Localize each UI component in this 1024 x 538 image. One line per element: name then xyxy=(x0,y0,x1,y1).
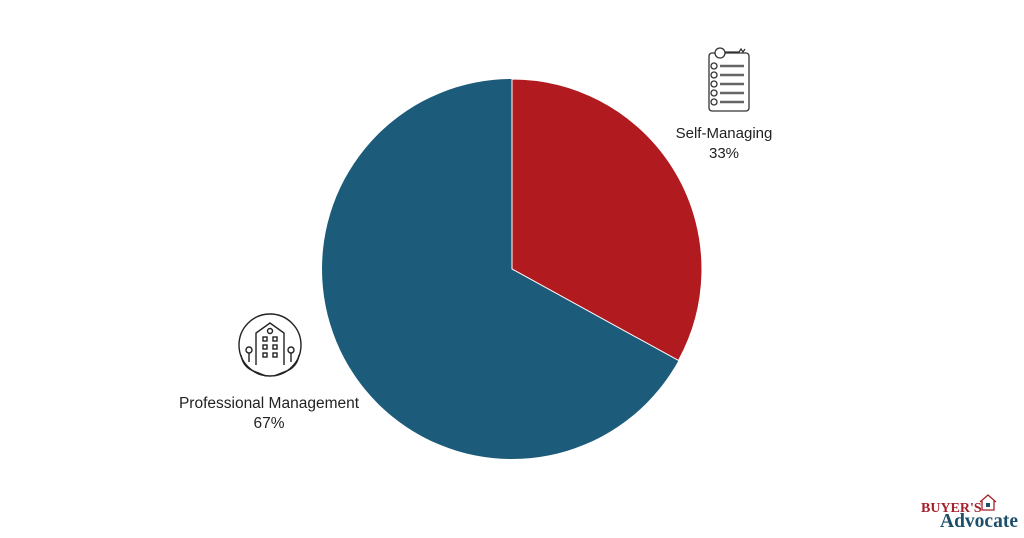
logo: buyers advocate xyxy=(921,495,1018,532)
icon: building in hands xyxy=(239,314,301,376)
pie slice: self-managing xyxy=(512,79,702,360)
label: professional management xyxy=(179,395,360,432)
label: professional management: 67% xyxy=(253,415,285,432)
label: self-managing: Self-Managing xyxy=(676,125,772,142)
logo: buyers advocate: BUYER'S xyxy=(921,501,982,516)
label: professional management: Professional Management xyxy=(179,395,360,412)
label: self-managing: 33% xyxy=(709,145,739,162)
logo: buyers advocate: Advocate xyxy=(940,511,1018,532)
icon: clipboard with key xyxy=(709,48,749,111)
label: self-managing xyxy=(676,125,772,162)
pie slice: professional management xyxy=(322,79,702,459)
